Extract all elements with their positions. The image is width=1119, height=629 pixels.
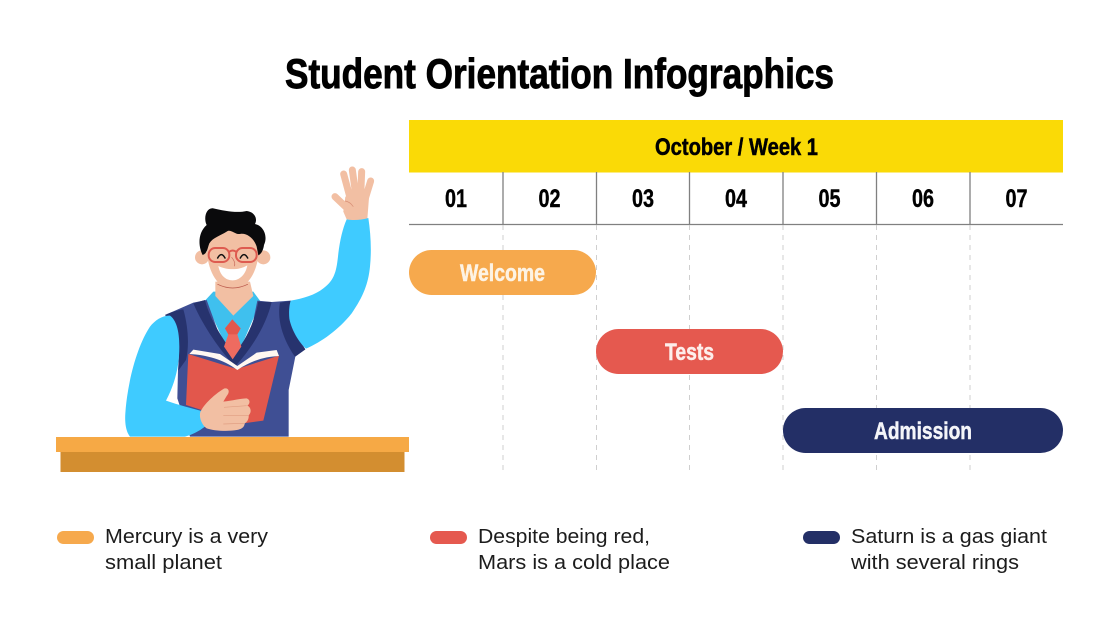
day numbers row: 07 bbox=[1006, 185, 1028, 213]
holding hand bbox=[200, 388, 251, 431]
shirt collar bbox=[205, 292, 261, 363]
vest trim bbox=[165, 300, 305, 371]
legend item: Saturn: Saturn is a gas giant bbox=[851, 526, 1047, 548]
hair bbox=[199, 208, 266, 255]
head bbox=[195, 208, 270, 289]
legend item: Mars bbox=[430, 526, 670, 574]
day numbers row bbox=[409, 172, 1063, 224]
day numbers row: 05 bbox=[818, 185, 841, 213]
legend item: Mars: Despite being red, bbox=[478, 526, 650, 548]
desk bbox=[56, 437, 409, 472]
book bbox=[186, 350, 279, 423]
smile bbox=[218, 265, 247, 280]
eyes and nose bbox=[218, 255, 248, 288]
day numbers row: 02 bbox=[538, 185, 560, 213]
legend item: Mars: Mars is a cold place bbox=[478, 552, 670, 574]
panel: gantt chart bbox=[409, 120, 1063, 472]
glasses bbox=[209, 248, 257, 262]
student figure bbox=[125, 170, 371, 437]
bar: Welcome: Welcome bbox=[460, 260, 545, 287]
bar: Tests bbox=[596, 329, 783, 374]
vest bbox=[165, 300, 305, 437]
raised hand bbox=[335, 170, 371, 220]
tie bbox=[224, 319, 241, 359]
title: Student Orientation Infographics bbox=[285, 50, 834, 97]
day numbers row: 03 bbox=[632, 185, 654, 213]
bar: Tests: Tests bbox=[665, 339, 714, 366]
day numbers row: 04 bbox=[725, 185, 747, 213]
raised arm sleeve bbox=[289, 218, 371, 349]
bar: Admission bbox=[783, 408, 1063, 453]
legend item: Mercury: Mercury is a very bbox=[105, 526, 268, 548]
legend item: Mercury bbox=[57, 526, 268, 574]
day numbers row: 06 bbox=[912, 185, 934, 213]
month header bbox=[409, 120, 1063, 172]
legend item: Mercury: small planet bbox=[105, 552, 222, 574]
neck bbox=[215, 282, 253, 316]
legend item: Saturn bbox=[803, 526, 1047, 574]
illustration: student at desk bbox=[56, 170, 409, 472]
left arm sleeve bbox=[125, 316, 205, 437]
bar: Welcome bbox=[409, 250, 596, 295]
day numbers row: 01 bbox=[445, 185, 467, 213]
legend item: Saturn: with several rings bbox=[850, 552, 1019, 574]
month header: October / Week 1 bbox=[655, 134, 818, 161]
bar: Admission: Admission bbox=[874, 418, 972, 445]
